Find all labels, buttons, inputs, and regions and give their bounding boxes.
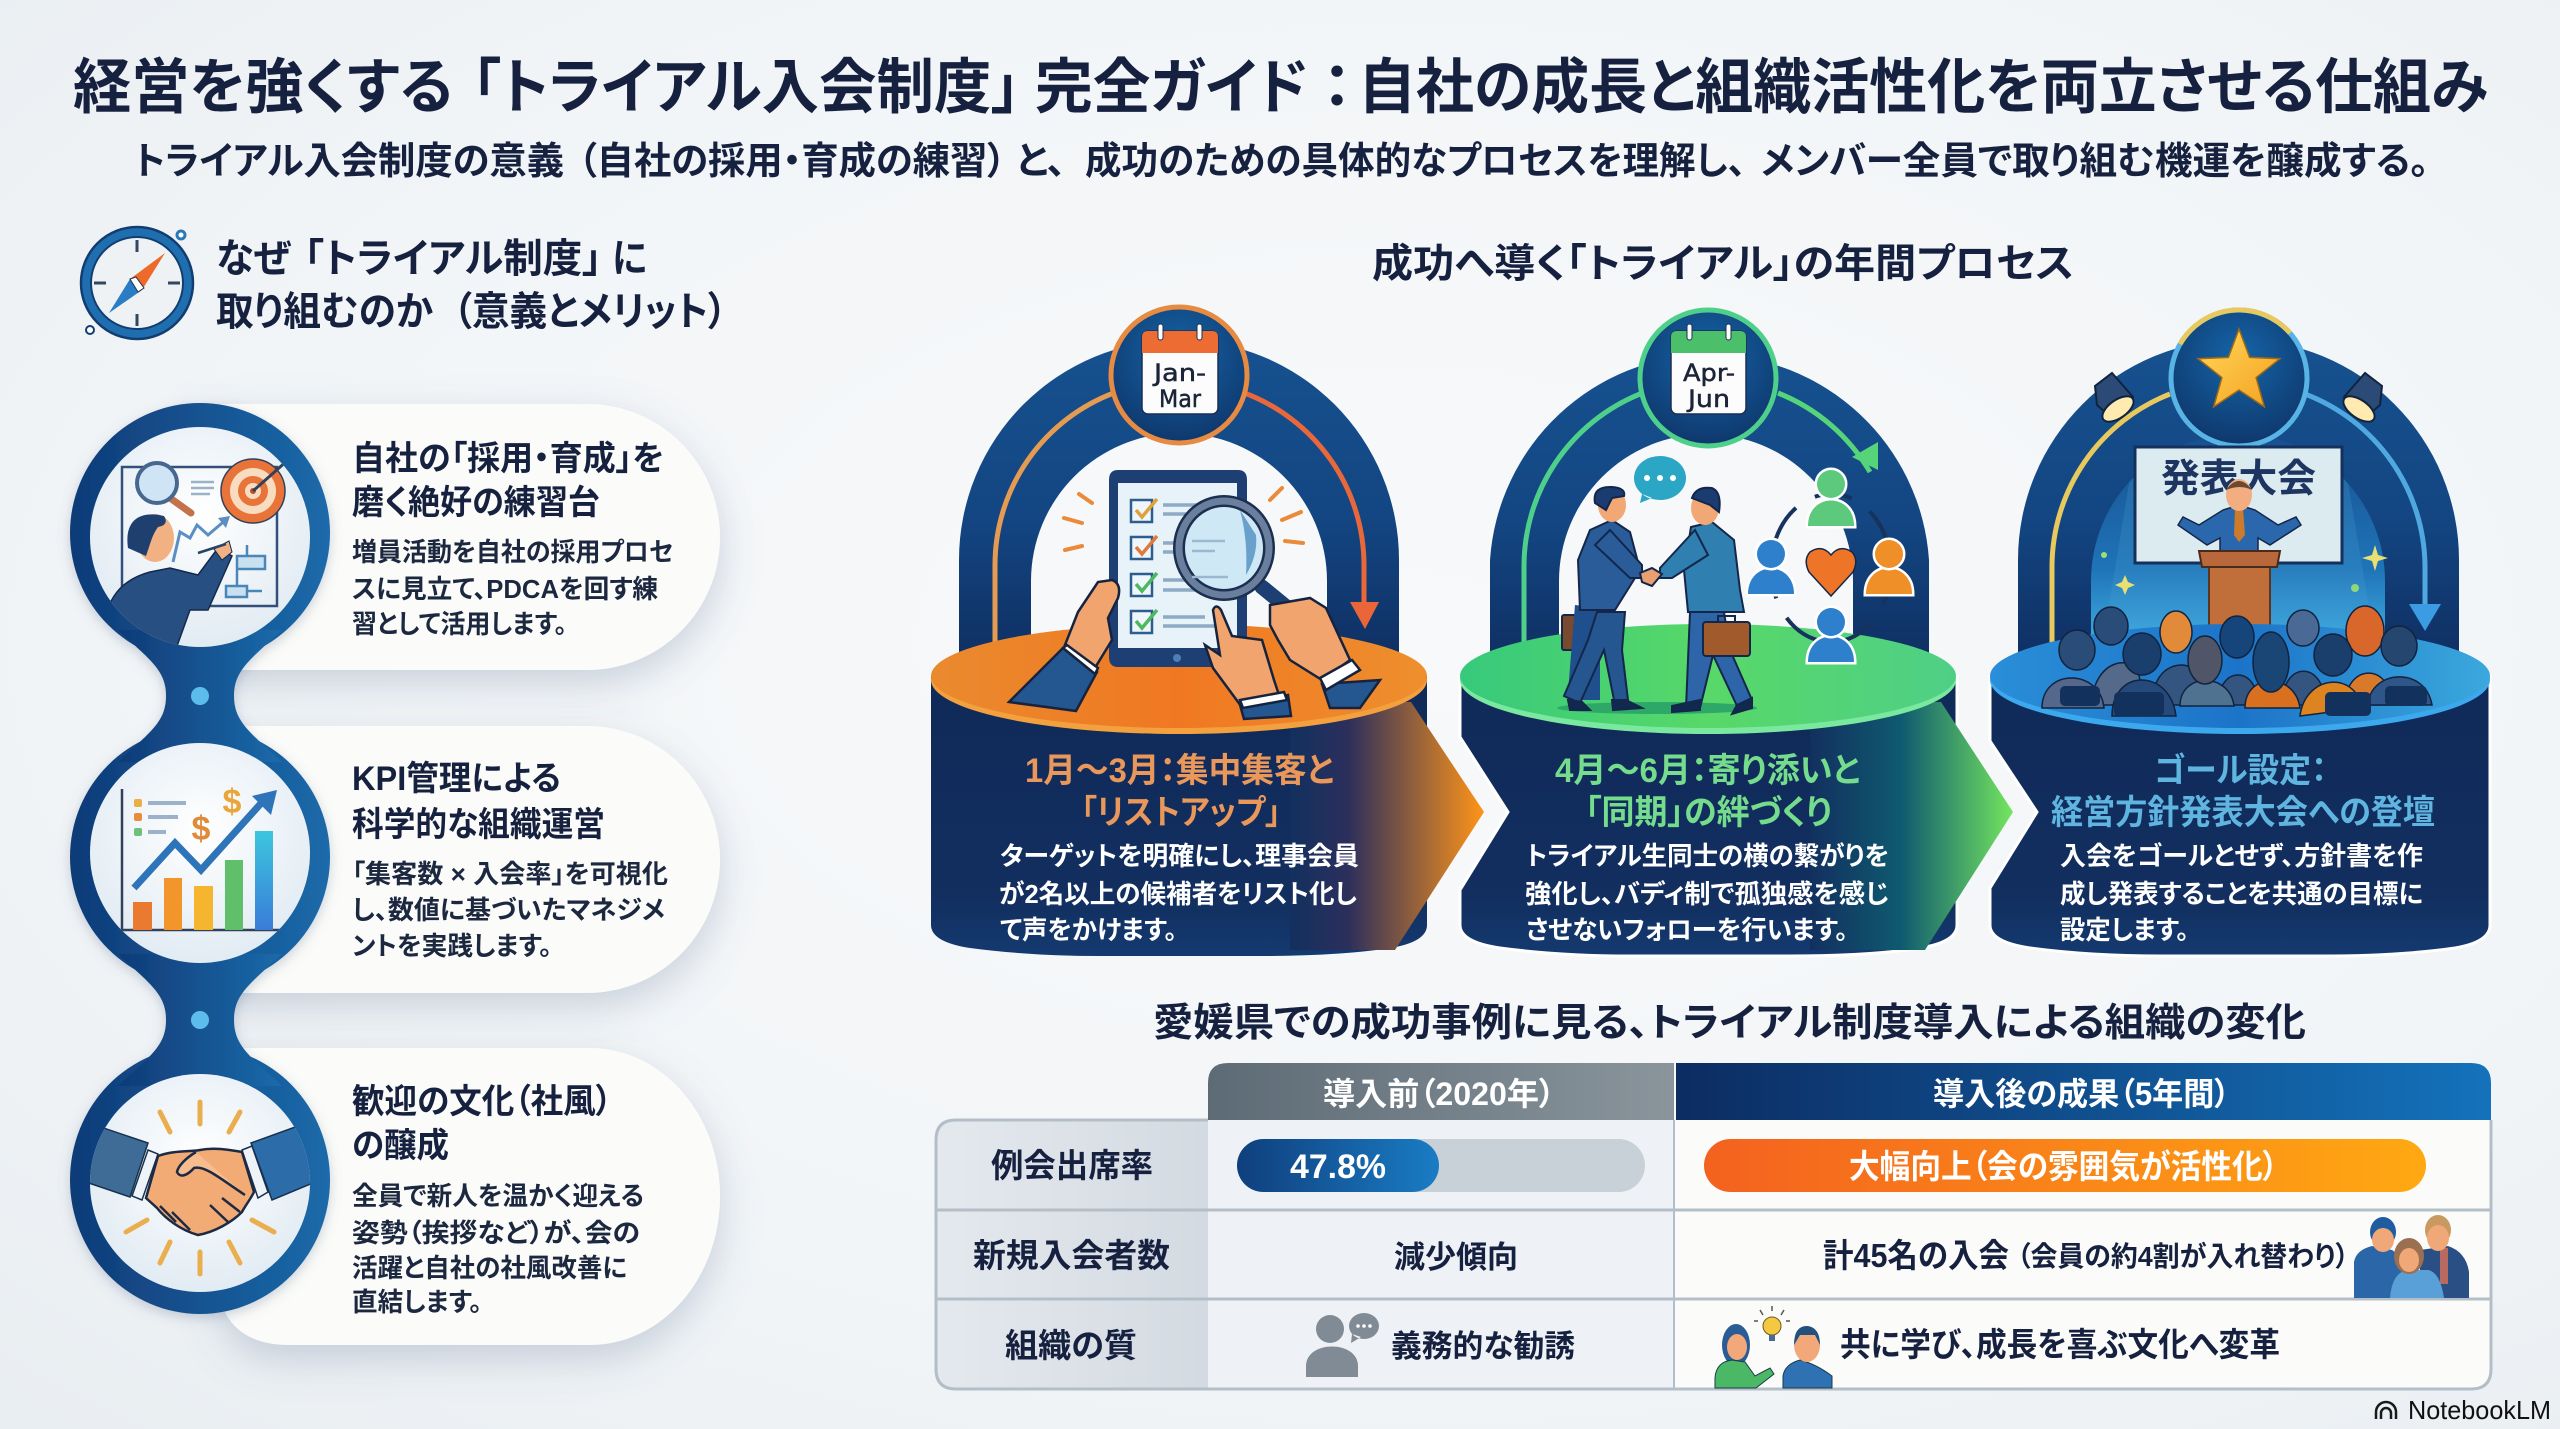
chain connector with three rings [70,403,330,1314]
cell: culture change: 共に学び、成長を喜ぶ文化へ変革 [1840,1326,2280,1363]
presentation screen [2135,447,2342,563]
icon: member group [2354,1215,2469,1298]
text block: merit 3: 直結します。 [352,1287,482,1317]
illustration: hands on tablet [1009,580,1380,719]
header: before: 導入前（2020年） [1323,1076,1555,1112]
title: 経営を強くする [73,54,453,121]
text block: merit 1: 自社の「採用・育成」を [352,440,664,478]
heading: why trial system [216,237,727,334]
cylinder base 3 [1990,676,2490,956]
arch 1 [959,340,1399,660]
arrow: gold and blue arc [2052,394,2441,650]
text block: step 2: 「同期」の絆づくり [1585,794,1832,832]
icon: handshake [80,1074,320,1292]
text block: merit 1: 磨く絶好の練習台 [352,484,600,522]
icon: star medallion [2171,310,2307,446]
bar: attendance after: 大幅向上（会の雰囲気が活性化） [1849,1148,2278,1185]
row label: quality: 組織の質 [1005,1327,1137,1364]
icon: KPI chart [90,743,310,963]
text block: step 1 [999,752,1359,945]
subtitle: 成功のための具体的なプロセスを理解し、 [1085,141,1746,183]
illustration: member ring with heart [1748,470,1912,662]
cell: 45 new members: 計45名の入会 [1823,1237,2009,1274]
panel: merit 2 pill [200,726,720,993]
header: after [1676,1063,2491,1120]
icon: people with lightbulb [1715,1306,1832,1388]
arch 3 with stage interior [2018,340,2459,660]
heading: why trial system: なぜ [216,237,292,281]
text block: merit 1: 増員活動を自社の採用プロセ [352,537,673,567]
illustration: two people shaking hands [1557,456,1757,714]
title: 「トライアル入会制度」 [472,54,1020,121]
presentation screen: 発表大会 [2161,458,2316,501]
arrow: chevron to next step [1810,702,2013,950]
text block: merit 2: し、数値に基づいたマネジメ [352,895,665,925]
icon: spotlights [2095,373,2382,427]
heading: Ehime success case: 愛媛県での成功事例に見る、トライアル制度導入による組織の変化 [1153,1002,2306,1045]
text block: merit 1: スに見立て、PDCAを回す練 [352,574,658,604]
header: before [1208,1063,1674,1120]
text block: step 3: 設定します。 [2060,915,2189,945]
arrow: orange arc [995,392,1379,650]
table column: row labels background [936,1120,1208,1389]
heading: why trial system: に [612,237,647,281]
text block: step 3: 経営方針発表大会への登壇 [2051,794,2435,832]
text block: step 2: トライアル生同士の横の繋がりを [1526,841,1889,871]
subtitle: と、 [1016,141,1066,183]
table column: before background [1208,1120,1674,1389]
title [73,54,2488,121]
cell: decreasing: 減少傾向 [1394,1240,1518,1275]
icon: calendar Apr-Jun: Apr- [1683,359,1735,387]
text block: merit 2 [352,760,668,961]
panel: step 1 Jan-Mar [931,307,1484,956]
text block: merit 3: 全員で新人を温かく迎える [352,1181,644,1211]
header: after: 導入後の成果（5年間） [1933,1076,2230,1112]
panel: step 2 Apr-Jun [1460,310,2013,956]
panel: merit 3 pill [200,1048,720,1345]
text block: step 2: 強化し、バディ制で孤独感を感じ [1525,879,1889,909]
text block: step 1: 「リストアップ」 [1081,794,1281,832]
text block: step 2: 4月〜6月：寄り添いと [1555,752,1860,790]
icon: KPI chart: $ [192,810,211,848]
heading: annual process: 成功へ導く「トライアル」の年間プロセス [1372,242,2074,286]
text block: merit 3: 歓迎の文化（社風） [352,1083,612,1121]
text block: step 3: 成し発表することを共通の目標に [2060,879,2423,909]
arrow: chevron to next step [1290,702,1484,950]
illustration: speaker at podium [2101,479,2388,640]
row label: new members: 新規入会者数 [973,1237,1170,1274]
row label: attendance: 例会出席率 [991,1147,1153,1184]
panel: step 3 goal [1990,310,2490,956]
illustration: audience [2042,606,2432,716]
icon: calendar Apr-Jun [1640,310,1776,446]
text block: merit 2: KPI管理による [352,760,561,798]
title: 自社の成長と組織活性化を両立させる仕組み [1358,54,2488,121]
heading: why trial system: （意義とメリット） [453,290,727,334]
table column: after background [1674,1120,2491,1389]
panel: merit 1 pill [200,404,720,670]
text block: step 1: て声をかけます。 [1000,915,1177,945]
text block: merit 3: 姿勢（挨拶など）が、会の [352,1218,640,1248]
text block: merit 2: 「集客数 × 入会率」を可視化 [352,859,668,889]
subtitle [134,141,2429,183]
icon: KPI chart: $ [223,783,242,821]
text block: step 3: 入会をゴールとせず、方針書を作 [2060,841,2423,871]
text block: merit 2: 科学的な組織運営 [352,806,605,844]
text block: step 2: させないフォローを行います。 [1526,915,1848,945]
subtitle: （自社の採用・育成の練習） [578,141,1006,183]
comparison table [936,1063,2491,1389]
subtitle: トライアル入会制度の意義 [134,141,564,183]
table outline and rules [936,1120,2491,1389]
icon: calendar Jan-Mar: Mar [1159,385,1201,413]
cell: 45 new members [1823,1237,2349,1274]
icon: analyst with target [90,427,310,660]
bar: attendance after [1704,1139,2426,1192]
heading: why trial system: 「トライアル制度」 [304,237,602,281]
icon: person with speech bubble [1306,1313,1379,1377]
icon: calendar Jan-Mar: Jan- [1152,359,1206,387]
bar: attendance before 47.8%: 47.8% [1290,1148,1386,1186]
arrow: green arc [1524,393,1878,650]
text block: step 1: が2名以上の候補者をリスト化し [999,879,1357,909]
cell: obligatory invitation: 義務的な勧誘 [1391,1329,1575,1364]
subtitle: メンバー全員で取り組む機運を醸成する。 [1761,141,2429,183]
cylinder base 2 [1460,676,1957,956]
title: ： [1322,54,1352,121]
cylinder base 1 [931,676,1427,956]
text block: step 3: ゴール設定： [2154,751,2327,790]
icon: calendar Apr-Jun: Jun [1686,385,1730,413]
text block: step 2 [1525,752,1889,945]
text block: merit 1 [352,440,673,639]
text block: merit 1: 習として活用します。 [352,609,567,639]
title: 完全ガイド [1035,54,1308,121]
icon: calendar Jan-Mar [1111,307,1247,443]
arch 2 [1490,355,1929,660]
illustration: tablet checklist [1064,470,1303,667]
NotebookLM watermark: NotebookLM [2408,1395,2551,1425]
text block: merit 3 [352,1083,644,1317]
cell: 45 new members: （会員の約4割が入れ替わり） [2017,1240,2349,1272]
icon: compass [81,227,193,339]
bar: attendance before 47.8% [1237,1139,1645,1192]
text block: step 1: ターゲットを明確にし、理事会員 [1000,841,1359,871]
heading: why trial system: 取り組むのか [216,290,433,334]
text block: merit 3: の醸成 [352,1127,449,1165]
text block: step 3 [2051,751,2435,945]
text block: merit 3: 活躍と自社の社風改善に [352,1253,627,1283]
text block: merit 2: ントを実践します。 [352,931,552,961]
text block: step 1: 1月〜3月：集中集客と [1025,752,1334,790]
